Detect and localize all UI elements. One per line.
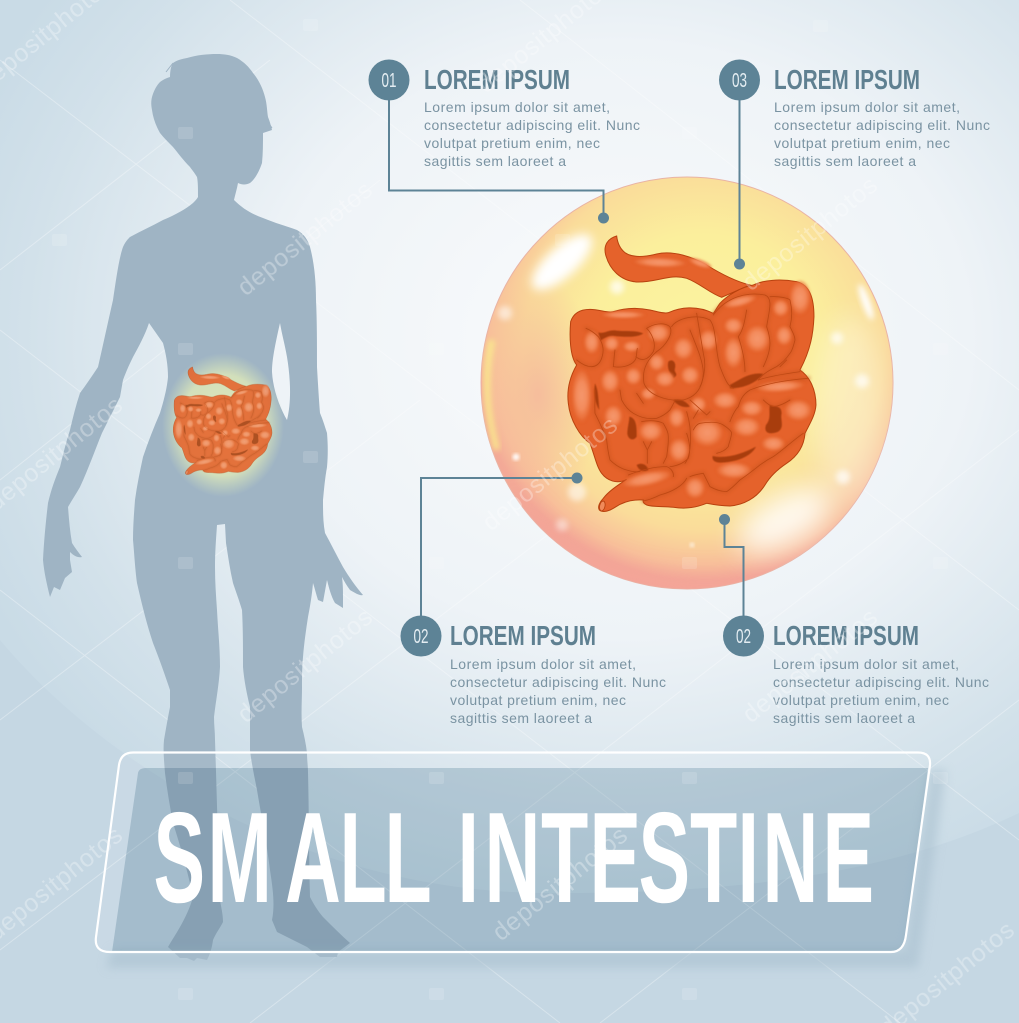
- lobe highlights: [174, 374, 271, 470]
- info block 03: consectetur adipiscing elit. Nunc: [774, 117, 990, 133]
- info block 01: consectetur adipiscing elit. Nunc: [424, 117, 640, 133]
- sphere: [476, 177, 893, 610]
- stock watermarks: depositphotos: [737, 603, 883, 729]
- lumen opening: [185, 470, 188, 474]
- info block 02 left: sagittis sem laoreet a: [450, 710, 592, 726]
- info block 03: Lorem ipsum dolor sit amet,: [774, 99, 960, 115]
- stock watermarks: depositphotos: [737, 171, 883, 297]
- stock watermarks: depositphotos: [232, 176, 378, 302]
- info block 03: sagittis sem laoreet a: [774, 153, 916, 169]
- info block 03: 03: [732, 70, 747, 92]
- info block 03: LOREM IPSUM: [774, 64, 920, 95]
- info block 03: volutpat pretium enim, nec: [774, 135, 950, 151]
- info block 02 right: LOREM IPSUM: [773, 620, 919, 651]
- duodenum tail: [188, 367, 246, 391]
- sphere tints and highlights: [482, 228, 892, 568]
- info block 02 left: Lorem ipsum dolor sit amet,: [450, 656, 636, 672]
- large intestine illustration: [568, 236, 816, 511]
- info block 02 right: sagittis sem laoreet a: [773, 710, 915, 726]
- info block 01: LOREM IPSUM: [424, 64, 570, 95]
- info block 02 left: LOREM IPSUM: [450, 620, 596, 651]
- title: SMALL INTESTINE: [153, 786, 874, 930]
- info block 01: Lorem ipsum dolor sit amet,: [424, 99, 610, 115]
- intestine mass: [173, 384, 272, 474]
- info block 03: [719, 60, 990, 270]
- info block 02 left: 02: [414, 626, 428, 648]
- stock watermarks: depositphotos: [477, 411, 623, 537]
- info block 02 right: Lorem ipsum dolor sit amet,: [773, 656, 959, 672]
- fold lines: [177, 390, 269, 470]
- info block 01: [368, 60, 640, 224]
- info block 01: sagittis sem laoreet a: [424, 153, 566, 169]
- person silhouette: [43, 54, 363, 961]
- info block 01: 01: [382, 70, 396, 92]
- fold shading: [177, 390, 269, 470]
- hair wisps: [166, 63, 272, 128]
- glass title panel: [96, 752, 946, 968]
- info block 02 right: [719, 514, 989, 726]
- info block 01: volutpat pretium enim, nec: [424, 135, 600, 151]
- stock watermarks: depositphotos: [487, 821, 633, 947]
- info block 02 right: consectetur adipiscing elit. Nunc: [773, 674, 989, 690]
- body glow: [162, 353, 284, 497]
- info block 02 right: volutpat pretium enim, nec: [773, 692, 949, 708]
- stock watermarks: depositphotos: [232, 603, 378, 729]
- info block 02 left: volutpat pretium enim, nec: [450, 692, 626, 708]
- info block 02 left: [400, 472, 666, 726]
- info block 02 right: 02: [736, 626, 751, 648]
- info block 02 left: consectetur adipiscing elit. Nunc: [450, 674, 666, 690]
- intestine inside the body: [173, 367, 272, 474]
- cavities: [184, 404, 258, 459]
